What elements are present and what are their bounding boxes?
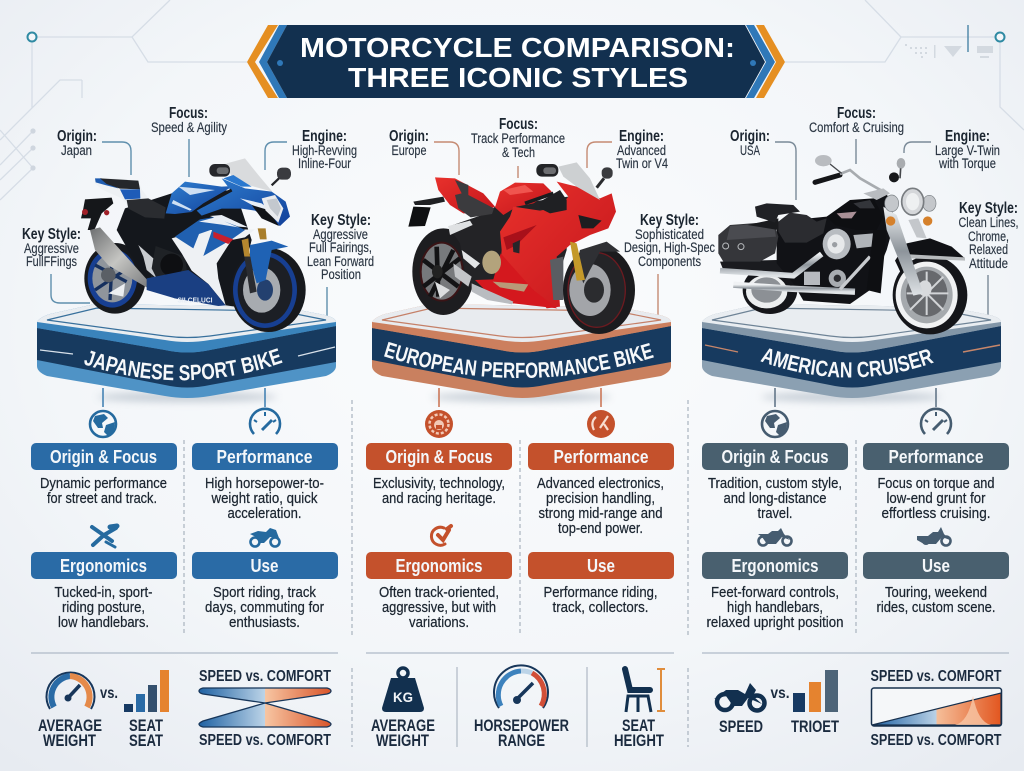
section dividers [31,388,1009,747]
callout: key style: Attitude [969,256,1008,271]
label: seat height: HEIGHT [614,732,664,750]
heading: ergonomics [31,552,177,579]
text: performance: acceleration. [228,506,302,522]
callout: key style: Components [638,254,701,269]
callout: origin: USA [740,143,760,158]
icon: kg weight [382,668,424,712]
text: performance: High horsepower-to- [205,476,324,492]
heading: origin and focus [31,443,177,470]
callout: focus: Comfort & Cruising [809,120,904,135]
heading: use [528,552,674,579]
icon: globe slate [762,411,788,437]
label: average weight [38,717,102,750]
text: performance: Advanced electronics, [537,476,664,492]
callout: key style left: FullFFings [26,254,77,269]
text: use: rides, custom scene. [876,600,996,616]
heading: performance: Performance [216,446,312,467]
label: speed: SPEED [719,718,763,736]
heading: ergonomics [366,552,512,579]
text: origin and focus [373,476,505,507]
callout: key style: Relaxed [969,242,1008,257]
text: origin and focus: and long-distance [724,491,826,507]
motorcycle: black American cruiser [718,155,967,334]
icon: cruiser motorcycle [758,528,792,546]
callout: key style left: Key Style: [22,226,81,243]
icon: gauge slate [921,409,951,434]
bar chart: trioet [793,670,838,712]
callout: key style: Chrome, [968,229,1009,244]
callout: focus [471,116,565,160]
callout: origin: Origin: [730,128,770,145]
panel: American stats [714,668,1002,749]
icon: swirl gauge orange [587,410,615,438]
title banner: THREE ICONIC STYLES [348,62,688,93]
panel: American cruiser details [702,409,1009,631]
motorcycle: red European performance bike [408,162,635,334]
callout: focus: Focus: [499,116,538,133]
platform label: Japanese sport bike: JAPANESE SPORT BIKE [84,348,282,380]
label: vs: vs. [100,685,118,702]
text: ergonomics: Often track-oriented, [379,585,499,601]
motorcycle: blue Japanese sport bike [81,158,306,332]
label: trioet: TRIOET [791,718,839,736]
heading: use: Use [587,555,615,576]
callout: key style [958,200,1018,271]
callout: origin: Japan [61,143,92,158]
icon: sport motorcycle blue [250,528,280,546]
callout: key style right: Full Fairings, [309,240,372,255]
callout: focus: & Tech [502,145,535,160]
text: use: days, commuting for [205,600,324,616]
title banner [247,25,785,98]
callout: key style: Design, High-Spec [624,240,715,255]
label: seat seat [129,717,163,750]
title banner: MOTORCYCLE COMPARISON: [300,32,735,63]
callout: focus: Speed & Agility [151,120,227,135]
text: origin and focus: Dynamic performance [40,476,167,492]
callout: engine [935,128,1000,171]
icon: kg weight: KG [393,689,413,705]
text: performance: Focus on torque and [878,476,994,492]
callout: focus [151,105,227,135]
heading: performance: Performance [888,446,984,467]
panel: European stats [371,665,665,750]
label: average weight: WEIGHT [376,732,429,750]
heading: use: Use [922,555,950,576]
callout: focus: Track Performance [471,131,565,146]
icon: chair seat height [625,669,665,712]
label: average weight: AVERAGE [38,717,102,735]
text: use: Touring, weekend [885,585,987,601]
callout: origin: Origin: [57,128,97,145]
callout: engine: High-Revving [292,143,357,158]
icon: globe blue [90,411,116,437]
text: ergonomics: variations. [409,615,469,631]
callout: key style right: Key Style: [311,212,371,229]
text: use [544,585,658,616]
icon: touring motorcycle [917,527,950,546]
platform: American cruiser [702,304,1001,406]
leader lines: Japanese sport bike [51,139,327,318]
heading: use: Use [250,555,278,576]
callout: origin [730,128,770,158]
panel: Japanese sport bike details [31,409,338,631]
label: seat height [614,717,664,750]
callout: engine [292,128,357,171]
callout: engine: Advanced [617,143,666,158]
heading: performance [863,443,1009,470]
text: use [205,585,324,631]
callout: engine: Large V-Twin [935,143,1000,158]
callout: key style [624,212,715,269]
platform label: American cruiser: AMERICAN CRUISER [760,348,934,378]
leader lines: American cruiser [775,139,988,316]
callout: key style right: Position [321,267,361,282]
text: ergonomics: Tucked-in, sport- [54,585,153,601]
text: origin and focus [708,476,842,522]
text: performance: strong mid-range and [538,506,662,522]
text: ergonomics [54,585,153,631]
heading: ergonomics: Ergonomics [396,555,482,576]
callout: key style: Key Style: [640,212,699,229]
callout: engine: with Torque [938,156,996,171]
heading: origin and focus: Origin & Focus [722,446,828,467]
text: performance: precision handling, [546,491,655,507]
background circuit lines [0,0,1024,200]
text: ergonomics: Feet-forward controls, [711,585,839,601]
callout: focus: Focus: [169,105,208,122]
text: performance: weight ratio, quick [211,491,318,507]
platform label: European performance bike: EUROPEAN PERFORMANCE BIKE [384,342,654,378]
chart: speed vs comfort hourglass [199,668,331,749]
motorcycle: blue Japanese sport bike: SILCELUCI [177,298,213,305]
icon: weight gauge [47,673,94,709]
callout: engine: Engine: [302,128,347,145]
text: ergonomics [706,585,844,631]
heading: use [863,552,1009,579]
label: horsepower range: RANGE [498,732,545,750]
callout: origin [389,128,429,158]
text: ergonomics: high handlebars, [727,600,823,616]
callout: engine: Engine: [945,128,990,145]
heading: performance [528,443,674,470]
text: ergonomics: relaxed upright position [706,615,844,631]
text: performance [205,476,324,522]
text: use: Sport riding, track [213,585,317,601]
label: average weight [371,717,435,750]
label: seat seat: SEAT [129,717,163,735]
text: performance [537,476,664,537]
callout: key style right [307,212,374,282]
callout: engine: Engine: [619,128,664,145]
text: use: enthusiasts. [229,615,300,631]
chart: speed vs comfort hourglass: SPEED vs. COMFORT [199,668,331,685]
label: average weight: WEIGHT [43,732,96,750]
divider lines [457,667,587,747]
text: use [876,585,996,616]
text: performance [878,476,994,522]
heading: origin and focus: Origin & Focus [50,446,157,467]
callout: engine [616,128,668,171]
callout: focus [809,105,904,135]
text: use: track, collectors. [552,600,648,616]
text: ergonomics: aggressive, but with [382,600,496,616]
label: horsepower range: HORSEPOWER [474,717,569,735]
text: performance: low-end grunt for [886,491,986,507]
label: horsepower range [474,717,569,750]
callout: key style right: Aggressive [313,227,368,242]
callout: key style: Sophisticated [635,227,704,242]
callouts: Japanese sport bike [22,105,374,282]
platform: European performance bike [372,304,671,406]
callout: origin [57,128,97,158]
icon: ergonomic posture blue [92,526,117,547]
text: origin and focus: Tradition, custom style, [708,476,842,492]
text: origin and focus: for street and track. [47,491,157,507]
text: performance: top-end power. [558,521,643,537]
panel: Japanese stats [38,668,331,750]
callout: origin: Europe [392,143,426,158]
label: vs: vs. [770,685,790,702]
chart: speed vs comfort hourglass: SPEED vs. COMFORT [199,732,331,749]
callouts: American cruiser [730,105,1018,271]
callout: origin: Origin: [389,128,429,145]
heading: performance [192,443,338,470]
text: origin and focus: and racing heritage. [382,491,496,507]
icon: target posture orange [431,526,451,545]
platform: Japanese sport bike [37,304,336,406]
callout: engine: Twin or V4 [616,156,668,171]
text: ergonomics [379,585,499,631]
heading: ergonomics: Ergonomics [60,555,147,576]
heading: origin and focus: Origin & Focus [386,446,492,467]
text: ergonomics: low handlebars. [58,615,149,631]
leader lines: European performance bike [434,142,658,316]
label: seat height: SEAT [622,717,655,735]
icon: gauge blue [250,409,280,434]
icon: motorcycle speed [714,683,764,710]
text: use: Performance riding, [544,585,658,601]
label: average weight: AVERAGE [371,717,435,735]
panel: European performance bike details [366,410,674,631]
heading: ergonomics: Ergonomics [732,555,818,576]
callout: key style left [22,226,81,269]
heading: origin and focus [702,443,848,470]
bar chart: seat [124,670,169,712]
callout: key style right: Lean Forward [307,254,374,269]
callout: key style left: Aggressive [24,241,79,256]
text: ergonomics: riding posture, [62,600,145,616]
icon: gear badge orange [425,410,453,438]
text: origin and focus [40,476,167,507]
text: origin and focus: travel. [758,506,792,522]
text: origin and focus: Exclusivity, technology, [373,476,505,492]
heading: use [192,552,338,579]
icon: horsepower gauge [494,665,548,708]
label: seat seat: SEAT [129,732,163,750]
callouts: European performance bike [389,116,715,269]
heading: origin and focus [366,443,512,470]
chart: speed vs comfort wedge [870,668,1002,749]
heading: ergonomics [702,552,848,579]
callout: focus: Focus: [837,105,876,122]
heading: performance: Performance [554,446,648,467]
callout: engine: Inline-Four [298,156,351,171]
text: performance: effortless cruising. [882,506,990,522]
